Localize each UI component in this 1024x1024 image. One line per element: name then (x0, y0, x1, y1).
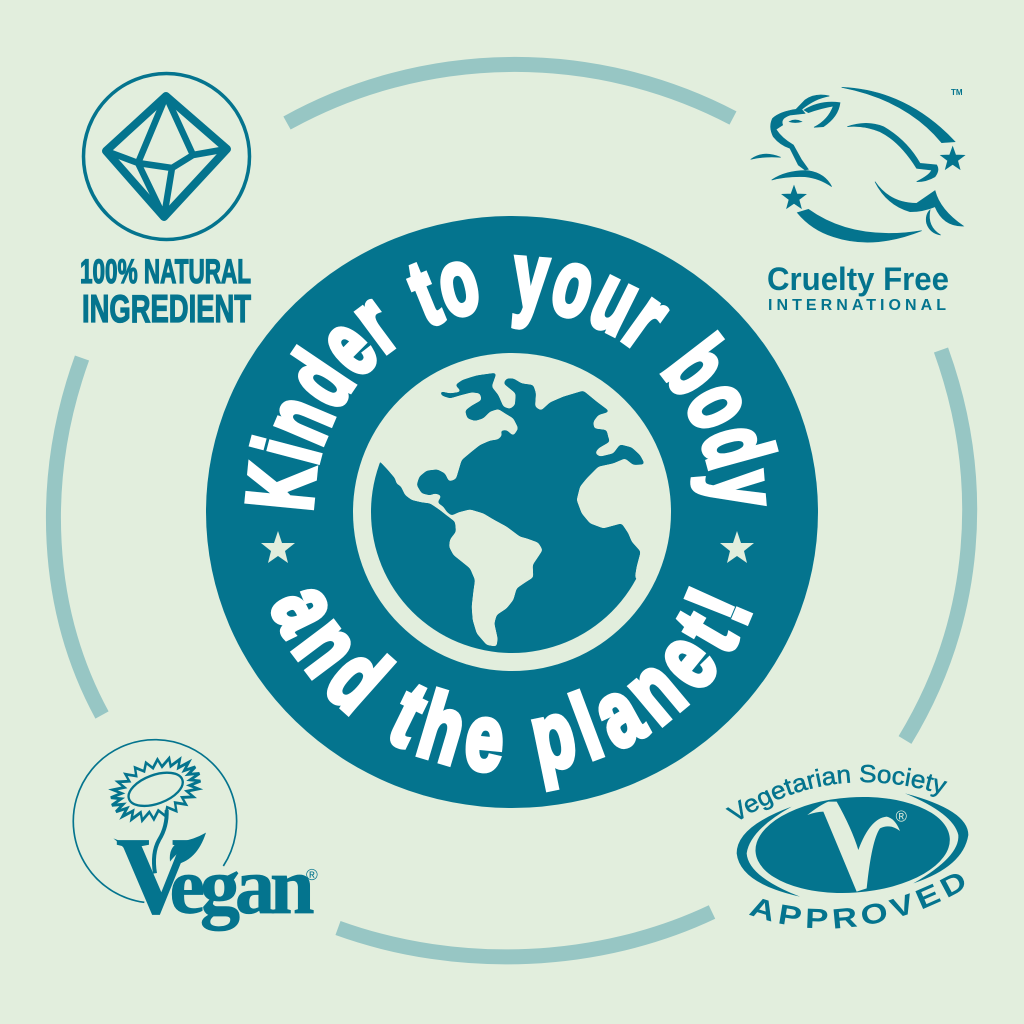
label: cruelty free: Cruelty Free (767, 261, 949, 297)
badge text: bottom: and the planet! (270, 586, 754, 792)
ring arc: top (287, 64, 733, 123)
star: left (261, 531, 295, 563)
label: 100% natural: 100% NATURAL (80, 253, 251, 291)
label: approved: APPROVED (749, 874, 964, 928)
label: international: INTERNATIONAL (768, 297, 946, 314)
label: ingredient: INGREDIENT (82, 288, 251, 331)
icon: diamond in circle (84, 74, 250, 240)
registered mark: ® (306, 867, 318, 884)
icon: oval with V (737, 791, 968, 899)
ring arc: right (905, 350, 970, 740)
logo: vegan (73, 740, 318, 937)
icon: leaping rabbit (751, 87, 965, 242)
badge text: top: Kinder to your body (244, 254, 779, 510)
ring arc: left (53, 358, 102, 715)
icon: oval with V: ® (896, 808, 908, 825)
icon: globe (350, 350, 677, 671)
trademark: TM (951, 88, 963, 97)
logo: cruelty free international (751, 87, 965, 314)
logo: vegetarian society approved (726, 764, 968, 928)
star: right (720, 531, 754, 563)
badge disc (206, 216, 818, 808)
logo: 100% natural ingredient (80, 74, 251, 331)
ring arc: bottom (338, 912, 712, 957)
icon: sunflower in circle (73, 740, 237, 902)
central badge (206, 216, 818, 808)
label: vegetarian society: Vegetarian Society (726, 764, 948, 820)
label: vegan: Vegan (116, 815, 314, 937)
